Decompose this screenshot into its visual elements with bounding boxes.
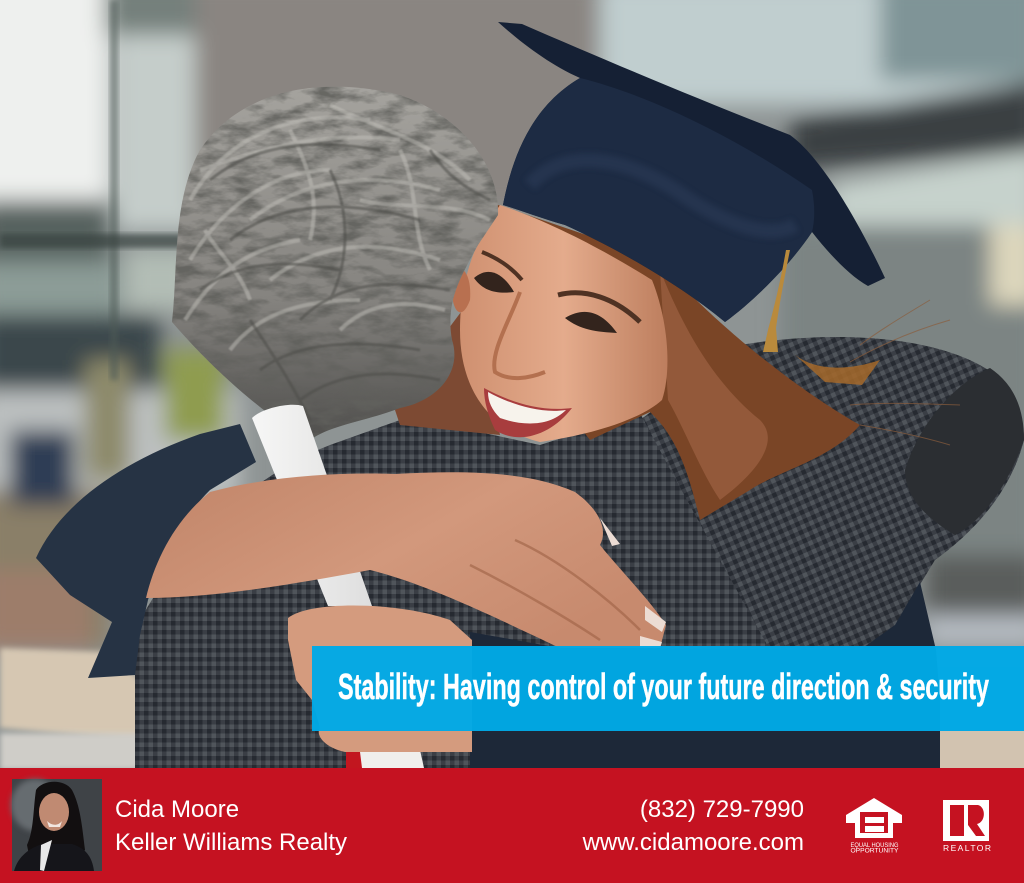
woman's far shoulder and patch (640, 337, 1024, 650)
neck of the mother (395, 300, 500, 435)
mother's body: checked jacket (135, 413, 940, 770)
agent portrait (11, 779, 102, 871)
cap tassel (763, 250, 880, 385)
icon: equal housing opportunity: OPPORTUNITY (850, 848, 899, 854)
phone number: (832) 729-7990 (640, 796, 804, 823)
banner: caption (312, 646, 1024, 731)
mother's gray hair (172, 86, 498, 438)
icon: realtor (943, 800, 991, 853)
sleeve of the graduate's gown (36, 424, 256, 678)
agent company: Keller Williams Realty (115, 829, 347, 856)
rolled diploma (252, 405, 424, 768)
graduation cap (498, 22, 885, 322)
website: www.cidamoore.com (582, 829, 804, 856)
graduate's face (452, 205, 667, 442)
lower hand holding the diploma (288, 605, 472, 752)
graduate's hair behind (475, 205, 960, 520)
icon: realtor: REALTOR (943, 843, 991, 853)
hugging arm and hand (146, 472, 666, 648)
icon: equal housing opportunity (846, 798, 902, 854)
agent name: Cida Moore (115, 796, 239, 823)
footer band (0, 768, 1024, 883)
icon: equal housing opportunity: EQUAL HOUSING (850, 842, 898, 849)
